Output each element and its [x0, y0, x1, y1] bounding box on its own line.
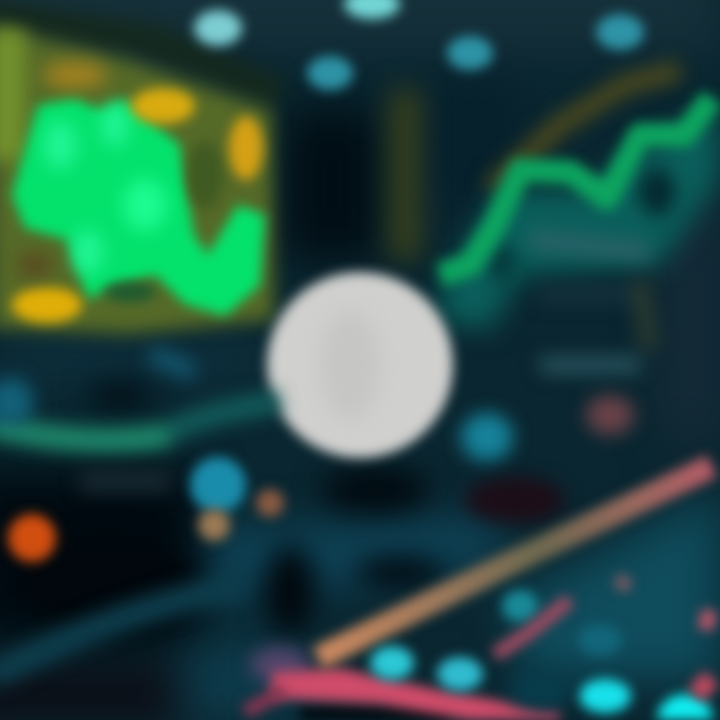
coin — [267, 272, 453, 458]
dark green notch — [104, 282, 156, 302]
tan blob — [198, 509, 230, 541]
red base left — [245, 690, 285, 712]
amber blob: upper left — [43, 61, 107, 89]
cyan ceiling lights — [194, 0, 644, 90]
blue blob: left edge — [0, 378, 34, 426]
dark red blob — [465, 476, 565, 524]
green map shape — [12, 98, 265, 316]
line chart: green trend — [440, 98, 712, 275]
teal waves: left — [0, 355, 280, 440]
olive vertical stripe — [390, 90, 420, 260]
bright green highlights — [44, 103, 167, 274]
coin inner shade — [320, 310, 380, 420]
panel: green map screen — [0, 15, 280, 334]
dark chart notch lower — [488, 243, 516, 283]
dark wedge under red strip — [300, 706, 450, 720]
brown blob: lower left — [17, 253, 53, 277]
yellow blob: right — [229, 116, 263, 180]
screen left highlight — [0, 30, 25, 160]
blue blob — [461, 413, 513, 461]
screen frame — [0, 25, 274, 334]
coin disc — [267, 272, 453, 458]
teal chart fill — [440, 110, 720, 330]
pink marks: bottom right — [495, 578, 715, 695]
cyan blob — [190, 457, 246, 513]
teal wave: lower — [0, 585, 240, 675]
brown blob — [256, 489, 284, 517]
red base strip — [272, 668, 560, 720]
olive chart shadow — [490, 70, 680, 190]
olive shade right — [187, 141, 223, 209]
cyan lights: bottom — [370, 590, 713, 720]
grey haze — [80, 470, 170, 492]
dark teal patch — [510, 670, 570, 710]
yellow blob: bottom — [12, 287, 82, 323]
peach diagonal bar — [318, 466, 712, 658]
dark chart notch — [639, 168, 675, 216]
chart bars — [530, 240, 650, 365]
purple glow — [250, 647, 310, 683]
orange blob — [8, 514, 56, 562]
dark band above screen — [0, 15, 280, 95]
red blob — [586, 395, 634, 435]
dark accents — [20, 382, 445, 635]
yellow blob: top — [131, 88, 195, 124]
